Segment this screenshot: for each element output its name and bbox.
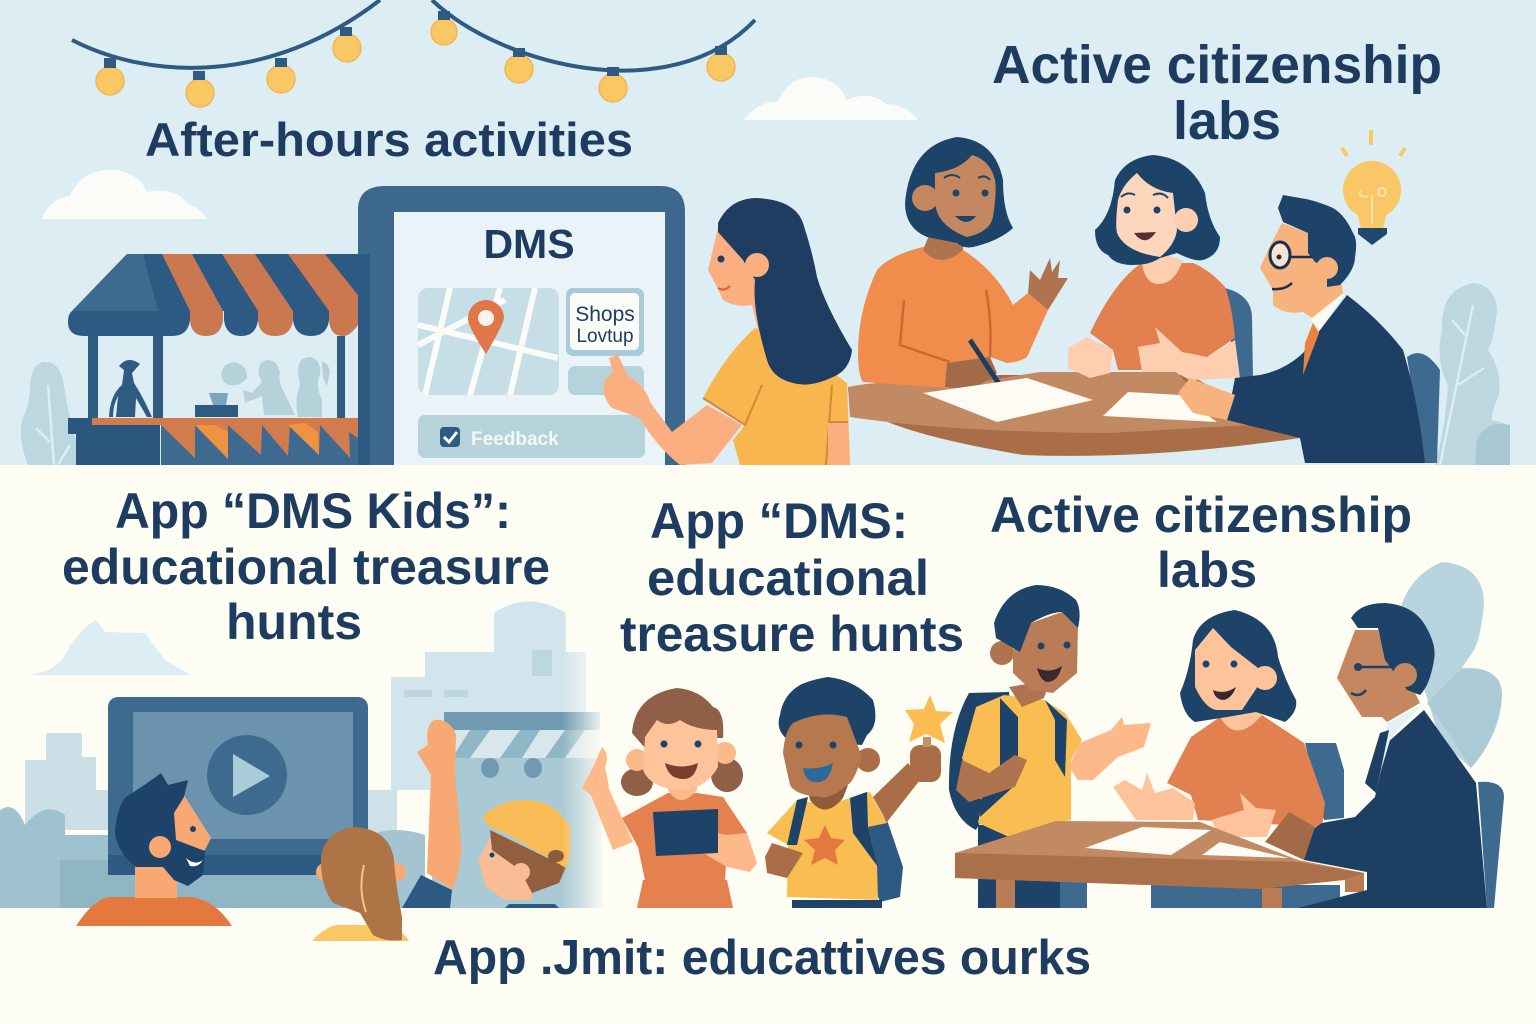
illustration: boy with yellow cap <box>478 800 570 908</box>
heading: active citizenship labs lower: Active citizenship <box>990 487 1412 543</box>
illustration: table top <box>848 372 1300 456</box>
panel: bottom background <box>0 465 1536 1024</box>
illustration: tablet <box>358 186 685 465</box>
feedback bar <box>418 415 645 458</box>
heading: app DMS: treasure hunts <box>620 606 964 662</box>
illustration: boy with star <box>765 677 953 908</box>
heading: app DMS Kids: App “DMS Kids”: <box>115 483 511 539</box>
illustration: raised hand <box>402 720 461 908</box>
illustration: lower table <box>955 821 1364 908</box>
fade between scenes <box>562 600 606 910</box>
heading: active citizenship labs lower: labs <box>1157 542 1257 598</box>
second paper on table <box>1103 392 1217 422</box>
illustration: background plants right <box>1435 283 1510 465</box>
icon: cloud top centre <box>744 77 918 120</box>
shops lookup card: Shops <box>575 303 635 326</box>
illustration: woman at lower table <box>1113 610 1344 908</box>
illustration: girl from behind with raised arm <box>312 827 409 941</box>
shops lookup card <box>566 288 644 356</box>
illustration: man in suit with glasses <box>1178 195 1440 463</box>
panel: top background <box>0 0 1536 465</box>
heading: active citizenship labs top: labs <box>1173 91 1281 151</box>
heading: app jmit educatives ourks: App .Jmit: educattives ourks <box>433 931 1091 985</box>
illustration: background plants lower right <box>1400 562 1502 768</box>
stall counter <box>68 418 358 465</box>
icon: cloud left <box>42 170 207 219</box>
heading: active citizenship labs top: Active citizenship <box>992 35 1442 95</box>
heading: app DMS Kids: hunts <box>226 594 362 650</box>
icon: string lights <box>72 0 755 107</box>
heading: app DMS: App “DMS: <box>650 493 908 549</box>
stall vendor silhouette <box>109 360 152 417</box>
illustration: woman with long hair pointing at tablet <box>604 198 852 465</box>
stall awning <box>68 254 358 336</box>
illustration: girl with tablet <box>582 688 757 908</box>
illustration: video screen <box>108 697 368 875</box>
paper with sketch <box>923 378 1093 422</box>
feedback bar: Feedback <box>471 429 559 450</box>
tablet title: DMS <box>483 221 575 267</box>
illustration: faded city skyline <box>0 602 602 908</box>
icon: light bulb <box>1342 130 1405 245</box>
map <box>418 288 559 395</box>
illustration: dark skinned woman in orange <box>858 137 1093 422</box>
illustration: man in suit lower <box>1265 603 1504 908</box>
shops lookup card: Lovtup <box>576 326 634 347</box>
stall customers silhouettes <box>221 357 330 417</box>
illustration: market stall <box>68 254 358 465</box>
illustration: boy with backpack <box>949 585 1151 908</box>
heading: app DMS Kids: educational treasure <box>62 539 550 595</box>
heading: app DMS: educational <box>647 550 929 606</box>
illustration: background plant left <box>21 362 76 465</box>
illustration: bearded man <box>76 773 232 926</box>
illustration: woman in orange shirt <box>1068 155 1253 380</box>
heading: after-hours activities: After-hours activities <box>145 113 633 166</box>
